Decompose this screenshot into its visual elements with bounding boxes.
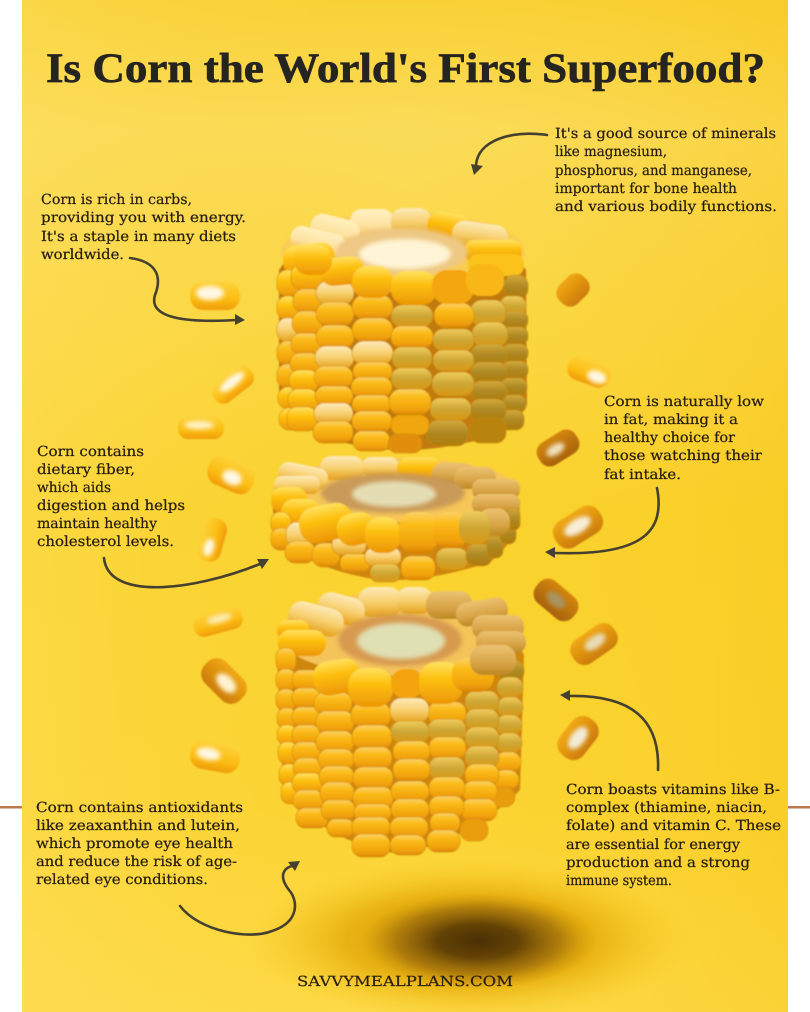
- callout: carbs: [41, 192, 246, 263]
- callout: fiber: [37, 444, 185, 550]
- callout: minerals: It's a good source of minerals: [555, 126, 776, 142]
- callout: low fat: healthy choice for: [604, 430, 735, 446]
- callout: fiber: dietary fiber,: [37, 462, 135, 478]
- callout: carbs: providing you with energy.: [41, 210, 246, 226]
- arrow: vitamins: [560, 690, 658, 770]
- arrow: low fat: [545, 488, 659, 558]
- callout: antioxidants: and reduce the risk of age-: [36, 854, 237, 870]
- callout: carbs: Corn is rich in carbs,: [41, 192, 192, 208]
- callout: low fat: Corn is naturally low: [604, 394, 764, 410]
- corn piece: top: [277, 208, 528, 453]
- callout: vitamins: complex (thiamine, niacin,: [566, 800, 767, 816]
- slice large kernels: [296, 500, 490, 553]
- callout: vitamins: production and a strong: [566, 855, 750, 871]
- footer website: SAVVYMEALPLANS.COM: [297, 974, 513, 990]
- large top-row kernels: [294, 245, 504, 305]
- callout: fiber: maintain healthy: [37, 516, 157, 532]
- callout: vitamins: are essential for energy: [566, 837, 740, 853]
- callout: carbs: It's a staple in many diets: [41, 229, 236, 245]
- callout: fiber: digestion and helps: [37, 498, 185, 514]
- arrow: carbs: [130, 258, 245, 325]
- callout: antioxidants: which promote eye health: [36, 836, 233, 852]
- callout: minerals: and various bodily functions.: [555, 199, 777, 215]
- callout: antioxidants: Corn contains antioxidants: [36, 800, 243, 816]
- callout: minerals: phosphorus, and manganese,: [555, 163, 752, 179]
- callout: low fat: fat intake.: [604, 467, 681, 483]
- callout: antioxidants: related eye conditions.: [36, 872, 208, 888]
- callout: minerals: [555, 126, 777, 215]
- slice rim kernels: [271, 456, 520, 527]
- bottom rim kernels: [277, 587, 526, 666]
- corn piece: bottom: [276, 587, 526, 857]
- top rim kernels: [281, 208, 524, 277]
- callout: fiber: cholesterol levels.: [37, 534, 174, 550]
- bottom rear columns: [276, 648, 524, 841]
- arrow: antioxidants: [180, 861, 300, 935]
- callout: minerals: important for bone health: [555, 181, 737, 197]
- slice lower row kernels: [271, 508, 520, 582]
- arrow: minerals: [471, 134, 547, 175]
- bottom large top-row kernels: [310, 645, 516, 707]
- corn piece: middle slice: [271, 456, 520, 582]
- callout: fiber: Corn contains: [37, 444, 144, 460]
- kernels front columns: [313, 281, 474, 453]
- bottom front columns: [314, 692, 466, 857]
- callout: antioxidants: like zeaxanthin and lutein,: [36, 818, 240, 834]
- callout: fiber: which aids: [37, 480, 111, 496]
- callout: low fat: in fat, making it a: [604, 412, 738, 428]
- callout: vitamins: Corn boasts vitamins like B-: [566, 782, 780, 798]
- callout: low fat: [604, 394, 764, 483]
- callout: vitamins: folate) and vitamin C. These: [566, 818, 781, 834]
- callout: carbs: worldwide.: [41, 247, 124, 263]
- loose corn kernels: [178, 269, 623, 775]
- callout: minerals: like magnesium,: [555, 144, 667, 160]
- ground shadow: [245, 858, 695, 1012]
- callout: vitamins: [566, 782, 781, 889]
- callout: low fat: those watching their: [604, 448, 762, 464]
- callout: vitamins: immune system.: [566, 873, 672, 889]
- title: Is Corn the World's First Superfood?: [46, 46, 765, 92]
- arrow: fiber: [104, 558, 269, 587]
- callout: antioxidants: [36, 800, 243, 888]
- kernels rear columns: [277, 264, 528, 443]
